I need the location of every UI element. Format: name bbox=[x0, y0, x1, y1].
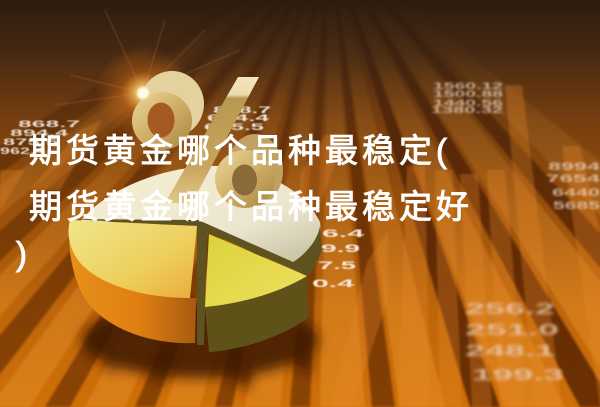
upper right blurred legend: 1440.56 bbox=[433, 98, 503, 108]
center right numbers bbox=[312, 228, 366, 290]
left chart numbers: 868.7 bbox=[18, 119, 80, 129]
far right blurred numbers: 7654 bbox=[546, 173, 600, 185]
left chart numbers bbox=[0, 119, 80, 156]
upper ring back bbox=[140, 71, 204, 137]
lower right blurred numbers: 251.0 bbox=[465, 322, 559, 339]
title line 3: ) bbox=[16, 235, 31, 272]
left chart numbers: 962.4 bbox=[0, 146, 45, 156]
far right blurred numbers bbox=[546, 161, 600, 212]
background bars bbox=[0, 85, 600, 407]
slash bbox=[165, 77, 259, 203]
lower ring bbox=[215, 150, 275, 208]
lower ring back bbox=[227, 134, 283, 206]
pie chart shadow bbox=[82, 302, 318, 392]
upper-right small numbers: 655.5 bbox=[204, 122, 264, 132]
center right numbers: 6.4 bbox=[322, 228, 366, 240]
center right numbers: 7.5 bbox=[318, 260, 356, 272]
percent sign bbox=[132, 71, 283, 208]
center right numbers: 9.9 bbox=[321, 243, 360, 255]
title line 2: 期货黄金哪个品种最稳定好 bbox=[29, 188, 473, 225]
orange slice side bbox=[69, 240, 196, 343]
far right blurred numbers: 5685 bbox=[553, 200, 600, 212]
beige disc slice bbox=[80, 166, 320, 262]
left chart numbers: 875.5 bbox=[3, 137, 58, 147]
light flare bbox=[55, 10, 240, 141]
far right blurred numbers: 8994 bbox=[548, 161, 600, 173]
upper-right small numbers bbox=[204, 105, 271, 132]
yellow slice top bbox=[205, 234, 307, 307]
disc side face bbox=[68, 219, 322, 345]
title line 1: 期货黄金哪个品种最稳定( bbox=[29, 132, 451, 169]
sparkle bbox=[137, 87, 149, 99]
center right numbers: 0.4 bbox=[312, 278, 356, 290]
upper right blurred legend: 1380.32 bbox=[431, 105, 503, 115]
yellow slice side bbox=[205, 276, 308, 352]
pie chart bbox=[68, 166, 322, 352]
far right blurred numbers: 6440 bbox=[552, 187, 600, 199]
upper ring hole bbox=[148, 102, 174, 138]
lower ring hole bbox=[232, 164, 257, 196]
upper-right small numbers: 868.7 bbox=[213, 105, 271, 115]
upper right blurred legend: 1500.88 bbox=[433, 89, 503, 99]
lower right blurred numbers: 248.1 bbox=[465, 343, 555, 360]
upper right blurred legend bbox=[431, 81, 503, 115]
left chart numbers: 894.4 bbox=[10, 128, 68, 138]
orange slice top bbox=[68, 220, 197, 298]
upper ring bbox=[132, 92, 192, 150]
lower right blurred numbers bbox=[465, 301, 564, 384]
lower right blurred numbers: 199.3 bbox=[472, 367, 564, 384]
lower right blurred numbers: 256.2 bbox=[465, 301, 555, 318]
upper right blurred legend: 1560.12 bbox=[433, 81, 503, 91]
upper-right small numbers: 664.4 bbox=[207, 113, 269, 123]
